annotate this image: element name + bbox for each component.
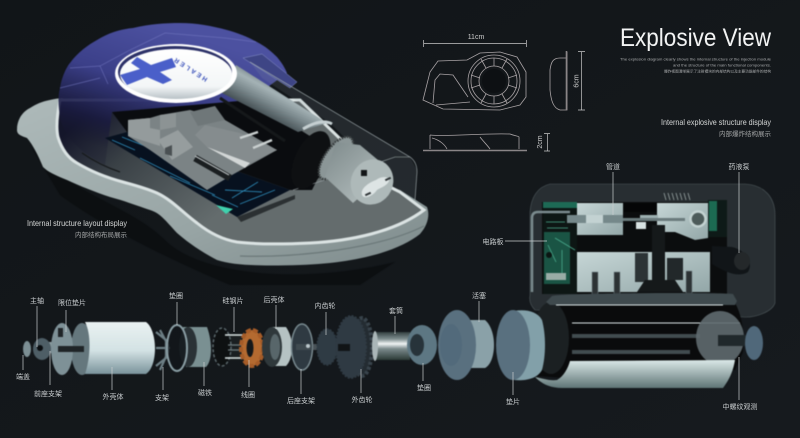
part: main shaft: [33, 338, 73, 360]
callout: circuit board: 电路板: [482, 237, 504, 246]
callout: piston: [472, 291, 486, 322]
circuit board right: [708, 200, 727, 237]
callout: limit washer: 限位垫片: [58, 298, 86, 307]
transparent dome: [58, 23, 287, 165]
part: outer gear: [336, 316, 372, 378]
pump body: [712, 246, 750, 274]
part: sleeve: [372, 331, 410, 361]
callout: outer shell: [102, 367, 124, 401]
part: rear washer: [71, 323, 93, 375]
motor highlights: [556, 305, 740, 323]
barrel frame bar: [220, 98, 285, 141]
ring fitting: [690, 212, 706, 226]
callout: silicon steel sheet: [222, 296, 244, 332]
dimension: front view 2cm: [423, 134, 550, 151]
lower panel: [577, 252, 710, 292]
callout: pipe: 管道: [606, 162, 620, 171]
pump module: [530, 184, 775, 388]
right caption: [661, 117, 772, 138]
callout: second gasket: [417, 363, 431, 392]
lower curved shell: [535, 360, 735, 388]
part: outer shell body: [85, 322, 155, 374]
callout: main shaft: 主轴: [30, 296, 44, 305]
pipe: [532, 212, 570, 292]
part: bracket: [156, 330, 170, 370]
part: silicon steel sheet: [213, 328, 244, 366]
main assembled device: [17, 23, 428, 285]
translucent end disc: [696, 311, 744, 365]
motor top band: [546, 293, 737, 305]
exploded motor parts: [23, 310, 545, 380]
far washer: [745, 326, 763, 360]
right caption: Internal explosive structure display: [661, 117, 772, 127]
callout: front bracket: [34, 351, 62, 398]
dimension: top view 11cm: 11cm: [468, 34, 484, 41]
description: [620, 58, 771, 74]
callout: rear shell: 后壳体: [264, 295, 284, 304]
connector wires: [664, 193, 690, 200]
motor end dark circle: [533, 302, 569, 374]
steel collar highlight: [303, 122, 332, 129]
part: gasket ring: [167, 325, 187, 371]
callout: circuit board: [482, 237, 547, 246]
callout: second gasket: 垫圈: [417, 383, 431, 392]
callout: piston: 活塞: [472, 291, 486, 300]
description: and the structure of the main functional components.: [673, 64, 771, 68]
tube assembly: [567, 215, 685, 223]
dimension: top view 11cm: [423, 34, 526, 110]
callout: washer: [506, 372, 520, 406]
callout: end cap: [16, 355, 30, 381]
cross logo: [120, 57, 176, 85]
part: coil: [241, 330, 263, 366]
grey injection block: [128, 106, 277, 190]
base reflection: [30, 145, 395, 285]
callout: outer gear: [352, 369, 372, 404]
dome facets: [60, 33, 256, 88]
part: inner gear: [313, 329, 337, 365]
gear: [312, 131, 360, 185]
callout: gasket: 垫圈: [169, 291, 183, 300]
callout: silicon steel sheet: 硅钢片: [222, 296, 244, 305]
part: end cap: [23, 341, 31, 357]
part: rear bracket: [292, 324, 312, 370]
dark interior: [112, 92, 332, 190]
central mechanism: [624, 203, 683, 292]
part: rear shell: [262, 327, 292, 367]
callout: bracket: [155, 367, 169, 402]
shaft: [718, 335, 750, 346]
posts: [592, 271, 692, 296]
callout: outer shell: 外壳体: [102, 392, 124, 401]
transparent syringe barrel: [222, 65, 327, 132]
dimension: side view 6cm: [550, 51, 585, 110]
dimension: side view 6cm: 6cm: [574, 74, 580, 88]
base inner surface: [57, 100, 424, 244]
callout: bracket: 支架: [155, 393, 169, 402]
left caption: Internal structure layout display: [27, 218, 128, 228]
callout: pipe: [606, 162, 620, 215]
translucent housing: [530, 184, 775, 317]
upper right panel: [657, 203, 708, 240]
dark gear collar: [283, 125, 339, 195]
callout: inner gear: 内齿轮: [314, 301, 336, 310]
callout: medicine pump: [728, 162, 750, 253]
callout: washer: 垫片: [506, 397, 520, 406]
shell outline: [250, 62, 417, 200]
dimension: front view 2cm: 2cm: [537, 135, 544, 149]
callout: rear bracket: [287, 369, 315, 405]
upper left panel: [577, 203, 623, 235]
motor dark core: [533, 303, 744, 378]
motor end: [325, 142, 401, 212]
callout: inner gear: [314, 301, 336, 335]
part: piston: [438, 310, 494, 380]
left caption: 内部结构布局展示: [75, 230, 128, 239]
callout: end cap: 端盖: [16, 372, 30, 381]
screws: [240, 132, 272, 148]
description: 爆炸视图清晰展示了注射模块的内部结构以及主要功能部件的结构: [664, 68, 771, 74]
part: gasket: [407, 325, 437, 365]
callout: outer gear: 外齿轮: [352, 395, 372, 404]
part: limit washer: [51, 323, 84, 375]
callout: magnet: 磁铁: [198, 388, 212, 397]
callout: limit washer: [58, 298, 86, 332]
base outer rim: [17, 98, 428, 265]
left caption: [27, 218, 128, 239]
callout: coil: 线圈: [241, 390, 255, 399]
callout: front bracket: 前座支架: [34, 389, 62, 398]
right caption: 内部爆炸结构展示: [719, 129, 772, 138]
circuit board: [105, 132, 295, 222]
description: The explosion diagram clearly shows the internal structure of the injection module: [620, 58, 771, 62]
callout: rear bracket: 后座支架: [287, 396, 315, 405]
blue shell strip: [243, 54, 297, 88]
callout: observation part: [722, 357, 758, 411]
surface arc: [82, 153, 120, 172]
black interior: [542, 202, 727, 294]
title: Explosive View: [620, 24, 772, 52]
outer transparent shell: [250, 62, 417, 200]
callout: coil: [241, 360, 255, 399]
callout: medicine pump: 药液泵: [728, 162, 750, 171]
callout: main shaft: [30, 296, 44, 347]
callout: observation part: 中螺纹观测: [722, 402, 758, 411]
base lower edge line: [240, 226, 424, 256]
logo disc: [115, 44, 237, 103]
callout: magnet: [198, 362, 212, 397]
guide rod: [195, 158, 230, 178]
callout: sleeve: 套筒: [389, 306, 403, 315]
logo wordmark: HEALER: [173, 56, 209, 83]
circuit board left: [543, 202, 577, 294]
part: magnet: [179, 327, 211, 367]
callout: gasket: [169, 291, 183, 325]
callout: sleeve: [389, 306, 403, 334]
callout: rear shell: [264, 295, 284, 329]
part: washer: [496, 310, 545, 380]
